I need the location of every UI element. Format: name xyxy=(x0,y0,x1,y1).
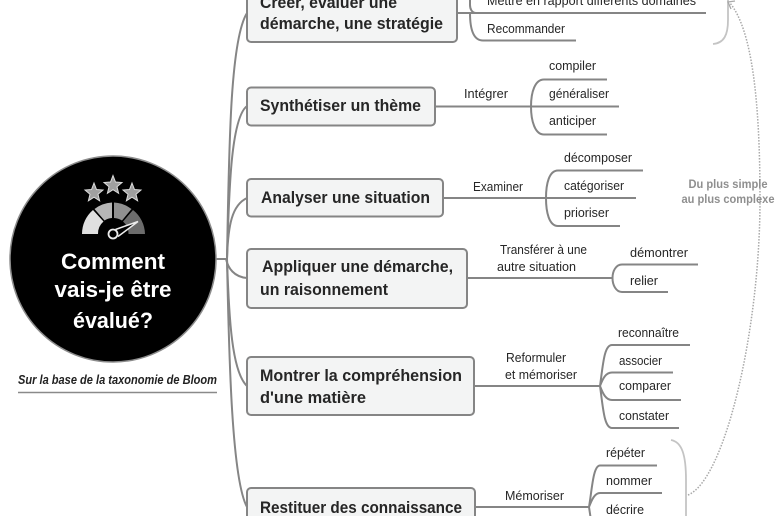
box: Synthétiser xyxy=(247,88,435,126)
box: Appliquer: Appliquer une démarche, xyxy=(262,258,453,276)
heading text xyxy=(54,249,172,333)
sub-items: Examiner: catégoriser xyxy=(564,178,625,193)
progression arrow: simple to complex xyxy=(671,0,760,516)
branch: Appliquer xyxy=(247,242,698,308)
sub-items: Intégrer: généraliser xyxy=(549,86,610,101)
sub-items: Reformuler: Reformuler xyxy=(506,350,567,365)
sub-items: Intégrer xyxy=(435,58,619,134)
sub-items: Mémoriser: nommer xyxy=(606,473,653,488)
needle xyxy=(116,222,138,236)
heading text: évalué? xyxy=(73,308,153,333)
heading text: Comment xyxy=(61,249,165,274)
branch: Analyser xyxy=(247,150,643,226)
upper bracket xyxy=(713,0,728,44)
box: Montrer: d'une matière xyxy=(260,389,366,407)
branch: Restituer xyxy=(247,445,662,516)
sub-items: Mémoriser: répéter xyxy=(606,445,646,460)
label: Du plus simple au plus complexe xyxy=(682,179,774,206)
box: Appliquer: un raisonnement xyxy=(260,281,388,299)
icon: three stars xyxy=(85,176,141,201)
heading text: vais-je être xyxy=(54,277,172,302)
label: Du plus simple au plus complexe: au plus complexe xyxy=(682,194,774,206)
sub-items: Mémoriser xyxy=(475,445,662,516)
label: Du plus simple au plus complexe: Du plus simple xyxy=(688,179,768,191)
sub-items: Reformuler: reconnaître xyxy=(618,325,679,340)
sub-items: Examiner xyxy=(443,150,643,226)
sub-items: Reformuler xyxy=(474,325,690,428)
sub-items: Transférer xyxy=(467,242,698,292)
sub-items: Reformuler: constater xyxy=(619,408,670,423)
box: Montrer xyxy=(247,357,474,415)
sub-items: Créer: Recommander xyxy=(487,21,566,36)
sub-items: Mémoriser: Mémoriser xyxy=(505,488,565,503)
sub-items: Transférer: démontrer xyxy=(630,245,689,260)
sub-items: Transférer: Transférer à une xyxy=(500,242,587,257)
box: Montrer: Montrer la compréhension xyxy=(260,367,462,385)
arrowhead xyxy=(728,1,735,9)
box: Restituer xyxy=(247,488,475,516)
sub-items: Intégrer: compiler xyxy=(549,58,597,73)
sub-items: Reformuler: et mémoriser xyxy=(505,367,578,382)
central circle: Comment vais-je être évalué? xyxy=(10,156,216,362)
branch: Créer, évaluer xyxy=(247,0,706,42)
box: Analyser xyxy=(247,179,443,216)
box: Créer: démarche, une stratégie xyxy=(260,15,443,33)
sub-items: Reformuler: comparer xyxy=(619,378,672,393)
sub-items: Examiner: prioriser xyxy=(564,205,610,220)
box: Analyser: Analyser une situation xyxy=(261,189,430,207)
sub-items: Transférer: autre situation xyxy=(497,259,576,274)
box: Synthétiser: Synthétiser un thème xyxy=(260,97,421,115)
sub-items: Créer xyxy=(457,0,706,40)
sub-items: Examiner: décomposer xyxy=(564,150,633,165)
central connectors to category boxes xyxy=(216,13,247,507)
icon: gauge xyxy=(82,202,145,238)
sub-items: Transférer: relier xyxy=(630,273,659,288)
branch: Synthétiser xyxy=(247,58,619,134)
sub-items: Intégrer: anticiper xyxy=(549,113,597,128)
caption: Bloom taxonomy: Sur la base de la taxonomie de Bloom xyxy=(18,373,217,387)
box: Créer xyxy=(247,0,457,42)
box: Appliquer xyxy=(247,249,467,308)
branch: Montrer xyxy=(247,325,690,428)
sub-items: Examiner: Examiner xyxy=(473,179,524,194)
sub-items: Reformuler: associer xyxy=(619,353,663,368)
dotted arrow xyxy=(688,3,760,495)
sub-items: Intégrer: Intégrer xyxy=(464,86,509,101)
lower bracket xyxy=(671,440,686,516)
